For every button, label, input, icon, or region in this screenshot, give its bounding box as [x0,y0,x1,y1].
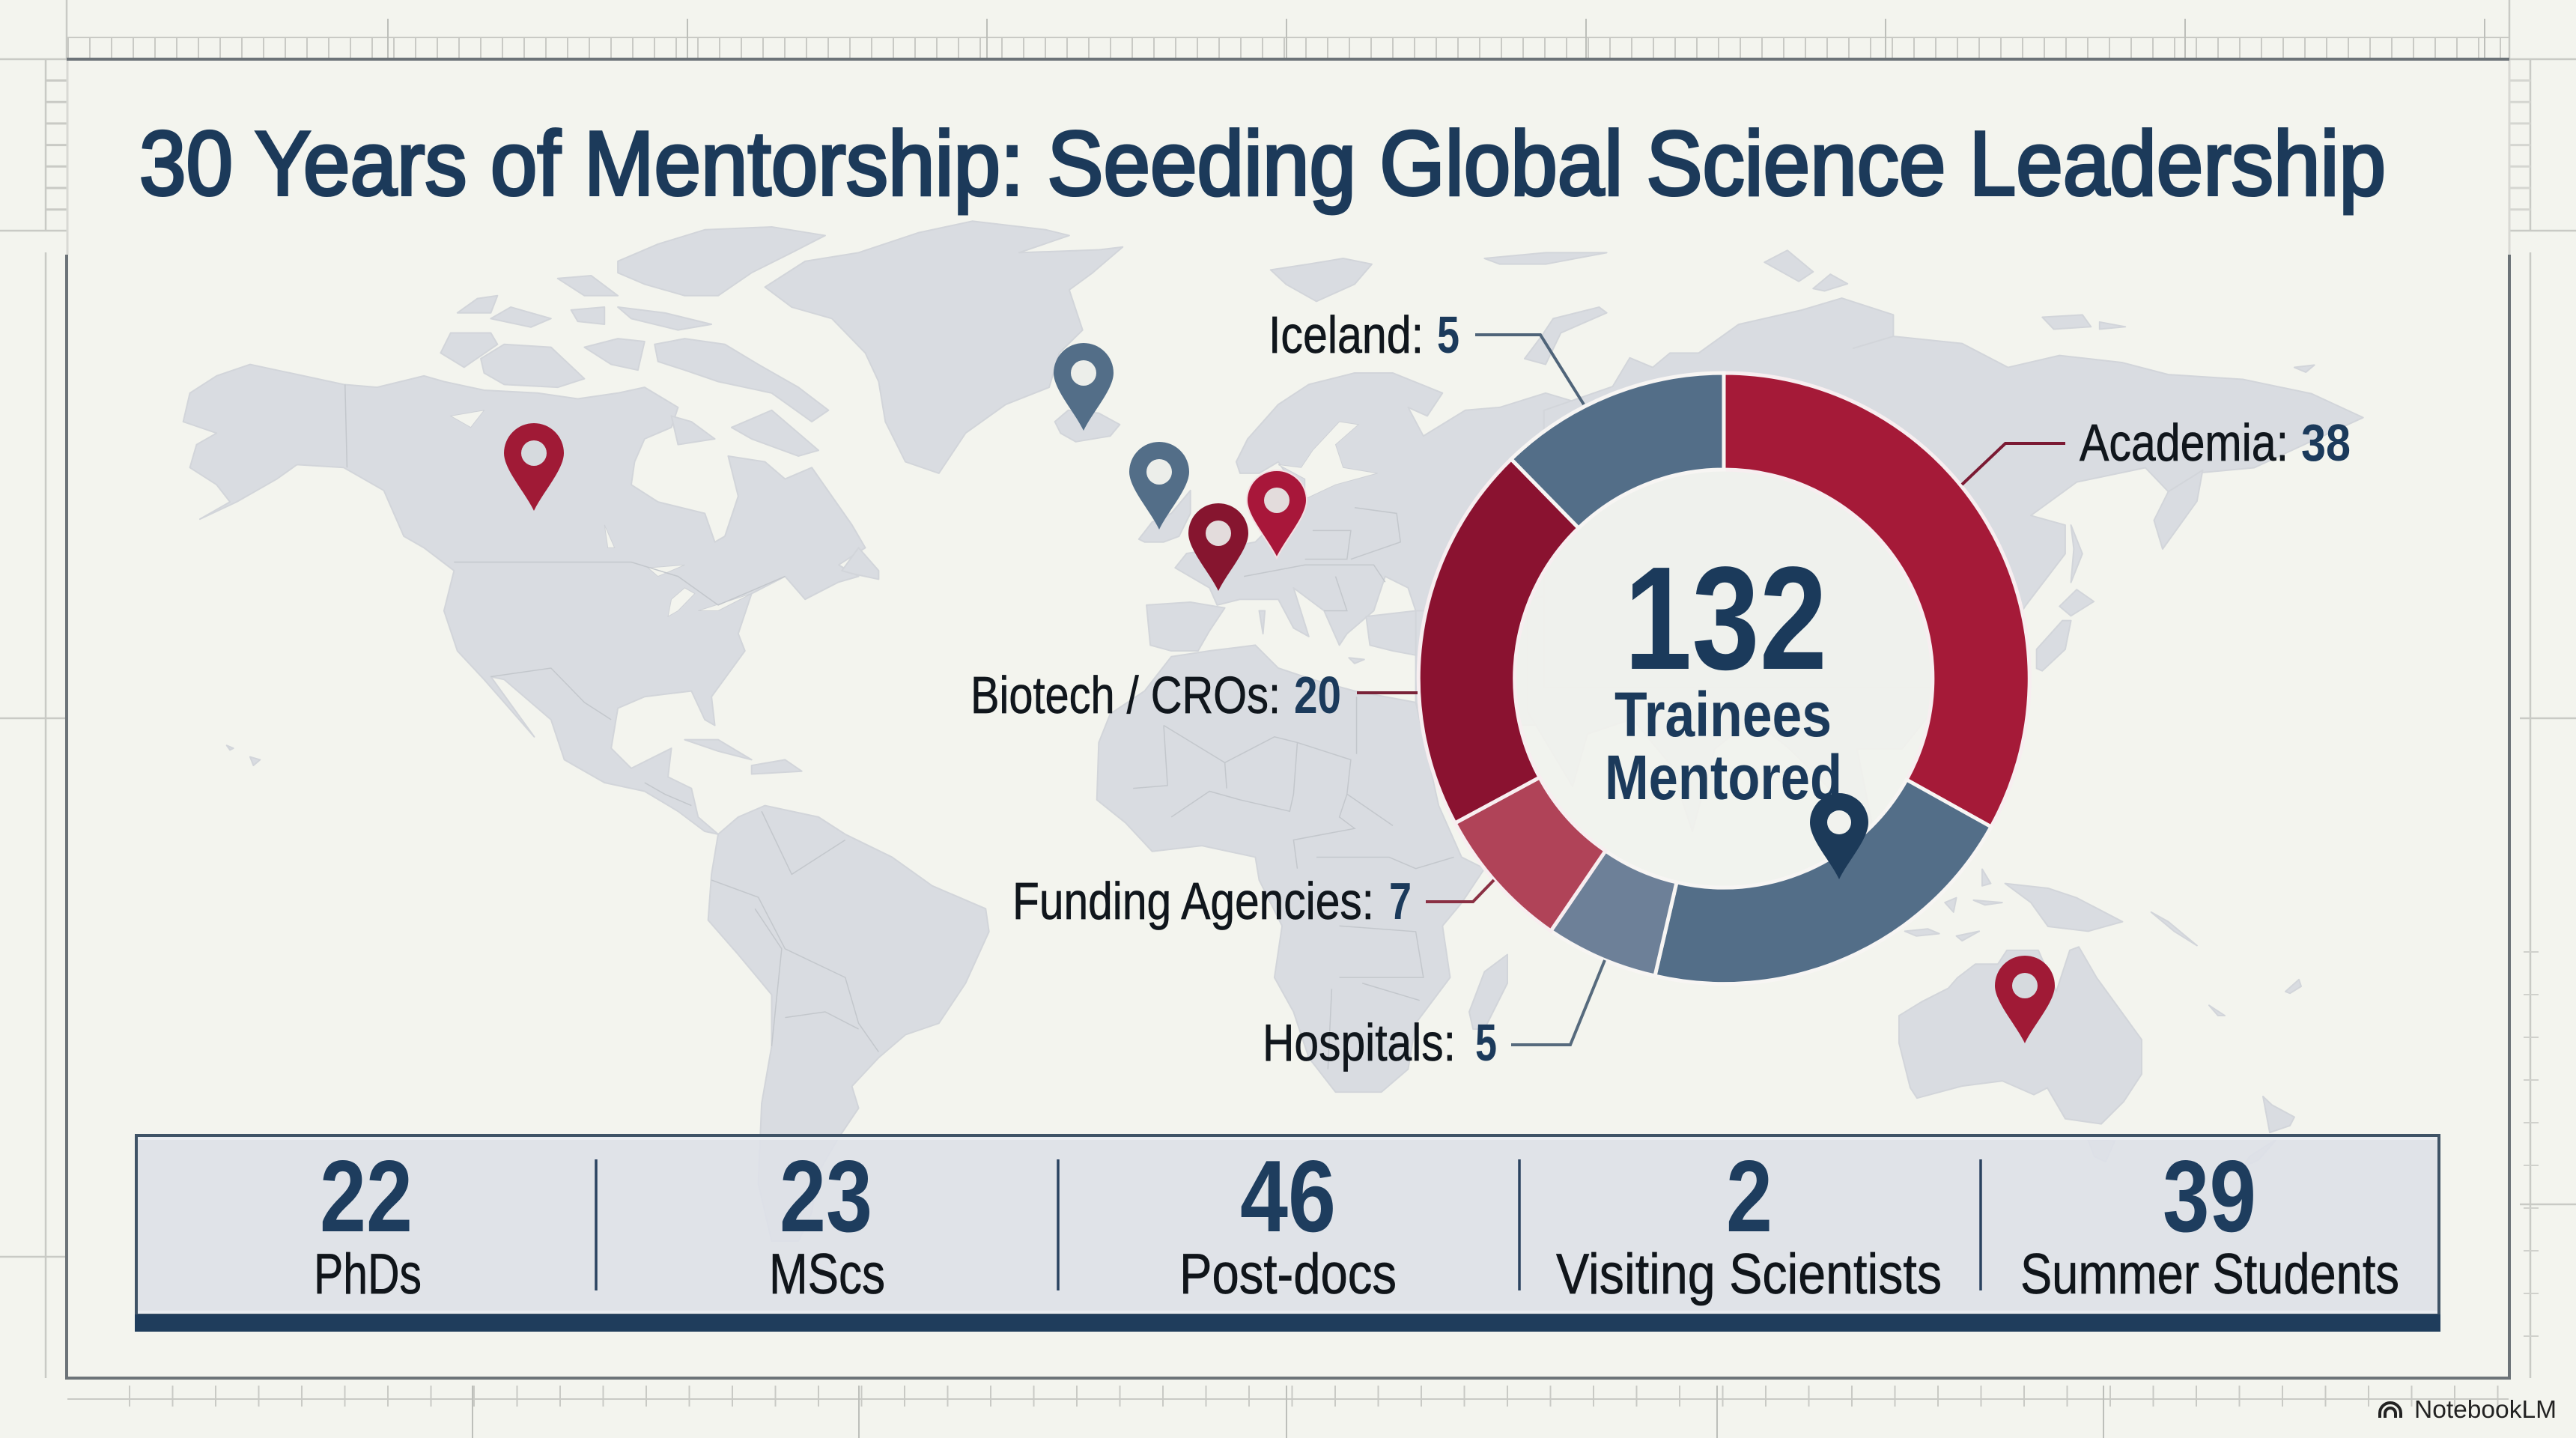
callout: Iceland [1269,306,1584,404]
callout: Funding Agencies: 7 [1389,872,1412,930]
stat: PhDs [314,1139,422,1306]
callout: Hospitals: Hospitals: [1263,1013,1456,1072]
callout: Hospitals: 5 [1475,1013,1497,1072]
map: South America [708,806,989,1241]
watermark: NotebookLM: NotebookLM [2414,1395,2557,1423]
callout: Funding Agencies: Funding Agencies: [1012,872,1374,930]
stat: Summer Students [2020,1139,2399,1306]
map: North America and Greenland [183,221,1123,834]
stat: Visiting Scientists: Visiting Scientists [1556,1243,1942,1306]
map: Africa [1097,645,1507,1092]
stat: Visiting Scientists [1556,1139,1942,1306]
icon: pin UK [1129,442,1189,530]
icon: pin Germany [1247,470,1307,558]
icon: pin Australia [1995,956,2055,1043]
stat: Post-docs: Post-docs [1179,1243,1397,1306]
segment: Academia [1724,373,2029,827]
icon: pin Iceland [1054,343,1114,431]
centre total: Trainees [1614,679,1832,750]
stat: Post-docs: 46 [1240,1139,1336,1253]
map: Australia and New Zealand [1899,947,2301,1167]
segment: large blue [1655,780,1991,984]
segment: Hospitals [1551,851,1677,976]
map: Asia [1528,250,2363,946]
stat: Summer Students: Summer Students [2020,1243,2399,1306]
world map [183,221,2363,1241]
callout: Biotech / CROs: 20 [1294,666,1341,724]
bar navy base [135,1314,2440,1332]
icon: pin Asia [1810,793,1868,879]
centre total: 132 [1624,536,1827,700]
stat: Summer Students: 39 [2163,1139,2256,1253]
segment: Funding Agencies [1455,777,1606,931]
donut chart [1418,373,2029,984]
stat: Post-docs [1179,1139,1397,1306]
callout: Academia: Academia: [2080,413,2288,472]
icon: pin Canada [504,423,564,511]
callout: Iceland: Iceland: [1269,306,1424,364]
stat: Visiting Scientists: 2 [1726,1139,1772,1253]
icon: pin France [1188,503,1248,591]
callout: Academia [1962,413,2351,485]
callout: Academia: 38 [2301,413,2351,472]
map: Europe and Western Asia [1055,252,1610,725]
stat: PhDs: PhDs [314,1243,422,1306]
stat: MScs [769,1139,885,1306]
statistics bar [135,1135,2440,1332]
centre total [1605,536,1842,813]
stat: MScs: 23 [780,1139,872,1253]
callout: Hospitals [1263,960,1605,1072]
centre total: Mentored [1605,742,1842,813]
segment: Iceland [1511,373,1724,528]
title: 30 Years of Mentorship: Seeding Global Science Leadership [139,112,2386,214]
bar background [136,1135,2439,1315]
stat: PhDs: 22 [320,1139,413,1253]
stat: MScs: MScs [769,1243,885,1306]
segment: Biotech / CROs [1418,459,1579,823]
callout: Iceland: 5 [1437,306,1459,364]
callout: Biotech / CROs: Biotech / CROs: [970,666,1281,724]
